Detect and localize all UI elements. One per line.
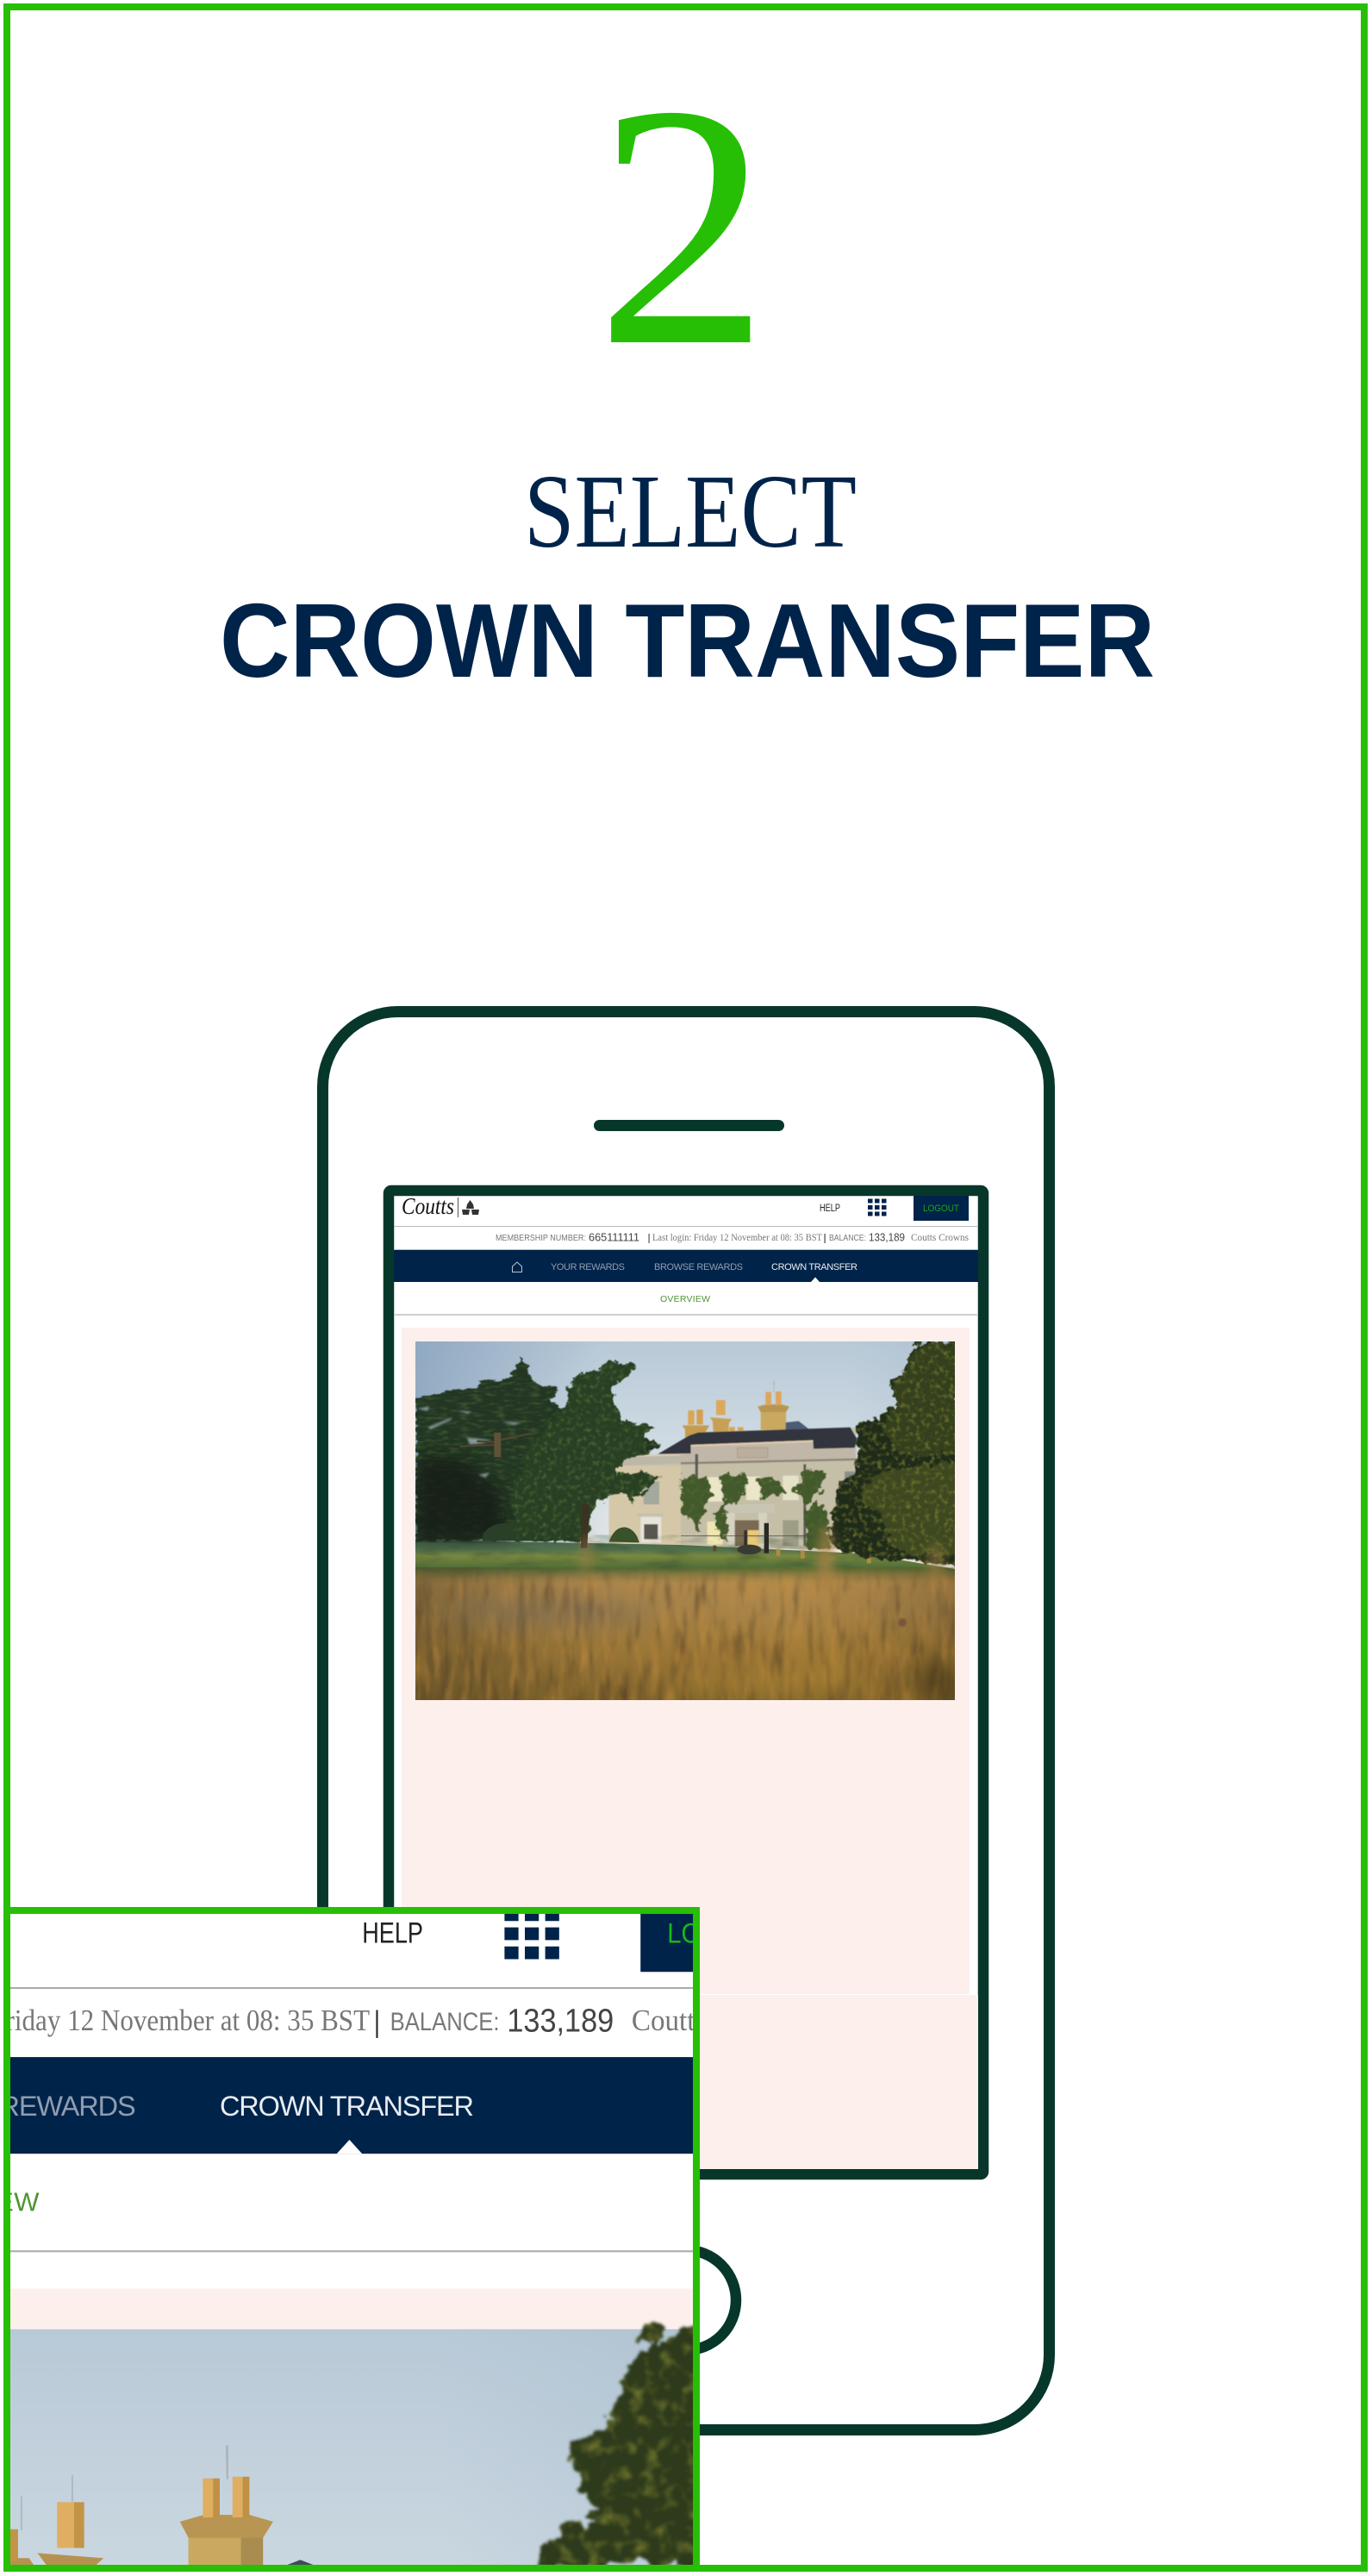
inset magnified screen — [0, 1914, 802, 2565]
inset pink panel — [0, 2289, 805, 2329]
step number: 2 — [596, 34, 769, 417]
navigation bar: CROWN TRANSFER — [771, 1262, 858, 1272]
grid menu icon — [868, 1198, 886, 1216]
membership info bar: BALANCE: — [829, 1234, 866, 1243]
membership info bar — [496, 1231, 969, 1243]
inset info bar: Coutts Crowns — [632, 2003, 802, 2037]
navigation bar: YOUR REWARDS — [551, 1262, 625, 1272]
header divider — [394, 1226, 978, 1227]
phone screen frame — [389, 1191, 983, 2174]
photo of country house — [415, 1341, 965, 1700]
inset background — [3, 1907, 700, 2572]
inset info bar — [0, 2003, 802, 2040]
membership info bar: MEMBERSHIP NUMBER: — [496, 1234, 586, 1243]
website screen — [394, 1193, 978, 2169]
help link: HELP — [820, 1204, 840, 1214]
tab divider — [394, 1314, 978, 1316]
inset logout button — [640, 1899, 803, 1972]
phone speaker — [594, 1120, 784, 1131]
inset logout button: LOGOUT — [667, 1917, 774, 1948]
membership info bar: 133,189 — [869, 1231, 905, 1243]
inset header divider — [0, 1987, 830, 1989]
heading: select: SELECT — [524, 453, 857, 570]
overview tab: OVERVIEW — [660, 1294, 710, 1304]
membership info bar: Coutts Crowns — [911, 1231, 969, 1243]
pink content panel — [402, 1328, 970, 1994]
inset help link: HELP — [362, 1916, 423, 1949]
inset info bar: BALANCE: — [390, 2008, 500, 2036]
inset navigation bar — [0, 2057, 830, 2154]
navigation bar: BROWSE REWARDS — [654, 1262, 743, 1272]
inset photo crop — [0, 2329, 770, 2569]
membership info bar: 665111111 — [589, 1231, 639, 1243]
inset tab divider — [0, 2250, 830, 2252]
inset grid menu icon — [504, 1909, 559, 1960]
logout button: LOGOUT — [923, 1204, 959, 1214]
inset green border — [7, 1910, 696, 2568]
phone body outline — [322, 1012, 1050, 2429]
logo: Coutts — [402, 1193, 454, 1219]
inset info bar: 133,189 — [507, 2003, 614, 2040]
phone illustration — [322, 1012, 1050, 2429]
pink lower panel — [394, 1995, 978, 2169]
zoomed inset callout — [0, 1882, 830, 2572]
phone home button — [636, 2250, 736, 2350]
inset navigation bar: CROWN TRANSFER — [220, 2091, 474, 2122]
heading: crown transfer: CROWN TRANSFER — [220, 582, 1155, 699]
logout button — [914, 1196, 969, 1221]
navigation bar — [394, 1249, 978, 1282]
membership info bar: Last login: Friday 12 November at 08: 35 BST — [652, 1231, 823, 1243]
